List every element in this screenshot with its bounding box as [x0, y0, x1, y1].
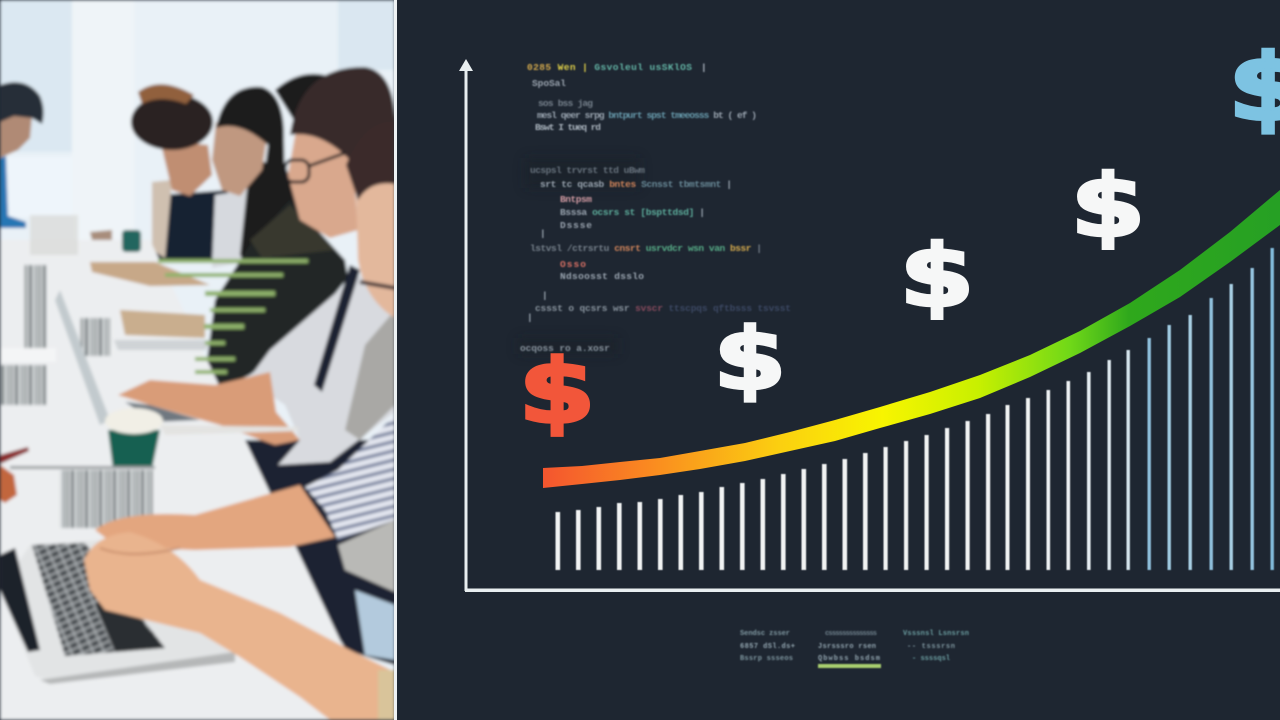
code block 4: [520, 303, 791, 354]
left hand with pen: [0, 447, 29, 503]
code block 1: mesl qeer srpg bntpurt spst tmeeosss bt ( ef ): [537, 110, 757, 121]
corner tan object: [378, 670, 395, 720]
legend column 1: Bssrp ssseos: [740, 655, 793, 663]
legend column 3: Vsssnsl Lsnsrsn: [903, 630, 969, 638]
code block 4: cssst o qcsrs wsr svscr ttscpqs qftbsss tsvsst: [535, 303, 791, 314]
code block 2: [530, 165, 732, 239]
foreground person head: [344, 157, 394, 318]
code block 3: |: [542, 290, 548, 301]
person with curly hair: [131, 84, 228, 262]
barcode patch: [60, 470, 153, 528]
legend caption: [740, 630, 969, 668]
code block 1: Bswt I tueq rd: [535, 122, 601, 133]
chart axes: [459, 59, 1280, 592]
icon: red dollar: $: [519, 342, 595, 443]
code block 1: sos bss jag: [538, 98, 593, 109]
legend column 3: [903, 630, 969, 663]
code block 2: srt tc qcasb bntes Scnsst tbmtsmnt |: [540, 179, 732, 190]
code block 2: ucspsl trvrst ttd uBwm: [530, 165, 645, 176]
light blue cloth at right: [355, 590, 395, 660]
dollar signs rising: [519, 34, 1280, 443]
legend column 1: [740, 630, 795, 663]
y axis with arrow: [459, 59, 473, 591]
code block 1: [527, 62, 757, 133]
icon: white dollar 1: $: [714, 311, 786, 409]
rising cost gradient curve: [543, 190, 1280, 488]
legend column 3: - ssssqsl: [912, 655, 950, 663]
typing hands and arms: [84, 485, 395, 720]
code block 4: |: [527, 312, 533, 323]
far-left person: [0, 82, 44, 228]
legend column 1: 6857 dSl.ds+: [740, 643, 795, 651]
blurred code listing: [520, 62, 791, 354]
foreground grey shirt: [338, 520, 395, 592]
code block 2: Bsssa ocsrs st [bspttdsd] |: [560, 207, 705, 218]
coffee cup: [105, 408, 163, 469]
wall and windows: [0, 0, 395, 720]
striped sleeve: [305, 415, 395, 540]
code block 1: 0285 Wen | Gsvoleul usSKlOS: [527, 62, 692, 73]
hands on second laptop: [118, 372, 300, 445]
legend column 2: Qbwbss bsdsm: [818, 655, 880, 663]
code block 3: Ndsoosst dsslo: [560, 271, 644, 282]
legend column 1: Sendsc zsser: [740, 630, 790, 638]
icon: white dollar 2: $: [900, 226, 974, 326]
code block 2: Bntpsm: [560, 194, 592, 205]
panel: office photo of team coding at laptops: [0, 0, 395, 720]
white table: [151, 246, 346, 648]
photo edge strip: [394, 0, 397, 720]
icon: white dollar 3: $: [1071, 156, 1145, 256]
legend column 2: Jsrsssro rsen: [818, 643, 876, 651]
code block 3: [530, 243, 762, 301]
trays and objects on table: [0, 215, 210, 425]
x axis: [465, 588, 1280, 592]
legend column 2: [818, 630, 880, 663]
green code overlay: [158, 259, 308, 374]
person shirt and lanyard: [248, 255, 395, 465]
person with glasses, jacket: [205, 67, 395, 392]
darker halos behind code: [518, 158, 640, 354]
laptop: [0, 540, 235, 684]
code block 4: ocqoss ro a.xosr: [520, 343, 610, 354]
bar chart: [556, 248, 1274, 570]
code block 2: |: [540, 228, 546, 239]
code block 3: lstvsl /ctrsrtu cnsrt usrvdcr wsn van bssr |: [530, 243, 762, 254]
code block 1: |: [701, 62, 707, 73]
code block 1: SpoSal: [532, 78, 566, 89]
code block 2: Dssse: [560, 220, 592, 231]
legend column 3: -- tsssrsn: [907, 643, 955, 651]
person with dark hair and white collar: [212, 74, 328, 270]
white tablet edge: [160, 425, 298, 435]
dark clothing behind table edge: [225, 440, 395, 665]
legend column 2: cssssssssssssss: [825, 630, 877, 638]
panel: background dark: [395, 0, 1280, 720]
legend green bar: [818, 664, 881, 668]
code block 3: Osso: [560, 259, 586, 270]
